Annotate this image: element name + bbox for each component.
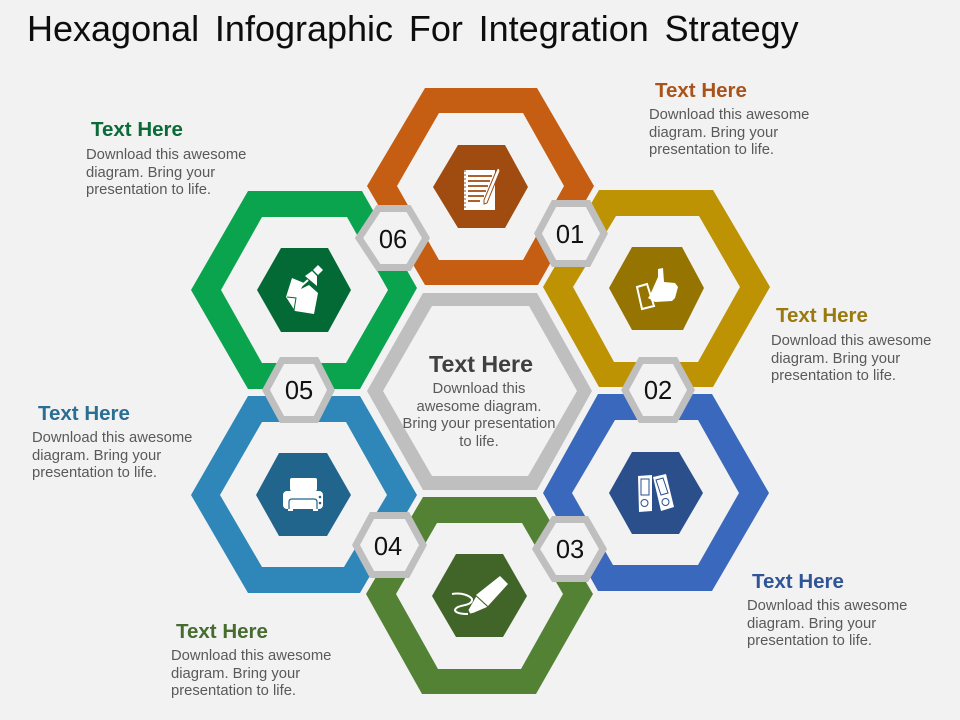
icon: marker pen [452, 576, 508, 614]
text block: green: Text Here [91, 118, 183, 141]
text block: blue: presentation to life. [747, 633, 872, 649]
text block: gold: diagram. Bring your [771, 351, 900, 367]
text block: orange [649, 79, 809, 158]
badge 02: 02 [644, 377, 672, 405]
icon: notepad and pen [464, 168, 500, 210]
badge 02 [625, 360, 691, 420]
text block: gold: Download this awesome [771, 333, 931, 349]
text block: green: diagram. Bring your [86, 165, 215, 181]
text block: olive [171, 620, 331, 699]
text block: blue: diagram. Bring your [747, 616, 876, 632]
panel: gold hexagon [543, 190, 770, 387]
center body text: Download this [433, 381, 525, 397]
text block: olive: Text Here [176, 620, 268, 643]
text block: olive: diagram. Bring your [171, 666, 300, 682]
badge 03 [536, 520, 603, 578]
center body text: awesome diagram. [416, 399, 542, 415]
text block: gold [771, 304, 931, 384]
olive inner hexagon [432, 554, 527, 637]
badge 01 [538, 204, 604, 264]
badge 06: 06 [379, 226, 407, 254]
badge 04: 04 [374, 533, 402, 561]
text block: blue [747, 570, 907, 649]
text block: teal [32, 402, 192, 481]
text block: orange: Download this awesome [649, 107, 809, 123]
text block: teal: Download this awesome [32, 430, 192, 446]
panel: orange hexagon [367, 88, 594, 285]
badge 05 [266, 360, 331, 420]
text block: blue: Download this awesome [747, 598, 907, 614]
text block: orange: presentation to life. [649, 142, 774, 158]
green inner hexagon [257, 248, 351, 332]
icon: pinned note [286, 265, 323, 314]
blue inner hexagon [609, 452, 703, 534]
icon: binders [638, 474, 674, 512]
gold inner hexagon [609, 247, 704, 330]
panel: blue hexagon [543, 394, 769, 591]
badge 03: 03 [556, 536, 584, 564]
center body text: Bring your presentation [402, 416, 556, 432]
badge 01: 01 [556, 221, 584, 249]
badge 06 [359, 208, 426, 268]
text block: teal: Text Here [38, 402, 130, 425]
text block: green: Download this awesome [86, 147, 246, 163]
center body text: to life. [459, 434, 499, 450]
panel: olive hexagon [366, 497, 593, 694]
text block: teal: diagram. Bring your [32, 448, 161, 464]
text block: orange: Text Here [655, 79, 747, 102]
text block: olive: presentation to life. [171, 683, 296, 699]
text block: olive: Download this awesome [171, 648, 331, 664]
text block: green [86, 118, 246, 198]
badge 05: 05 [285, 377, 313, 405]
title: Hexagonal Infographic For Integration Strategy [27, 8, 799, 49]
badge 04 [356, 516, 423, 574]
text block: green: presentation to life. [86, 182, 211, 198]
center hexagon [367, 293, 592, 490]
teal inner hexagon [256, 453, 351, 536]
panel: green hexagon [191, 191, 417, 389]
text block: blue: Text Here [752, 570, 844, 593]
center heading: Text Here [429, 351, 533, 377]
text block: gold: Text Here [776, 304, 868, 327]
icon: printer [283, 478, 323, 511]
icon: thumbs up [637, 268, 678, 309]
text block: gold: presentation to life. [771, 368, 896, 384]
text block: teal: presentation to life. [32, 465, 157, 481]
panel: teal hexagon [191, 396, 417, 593]
orange inner hexagon [433, 145, 528, 228]
text block: orange: diagram. Bring your [649, 125, 778, 141]
